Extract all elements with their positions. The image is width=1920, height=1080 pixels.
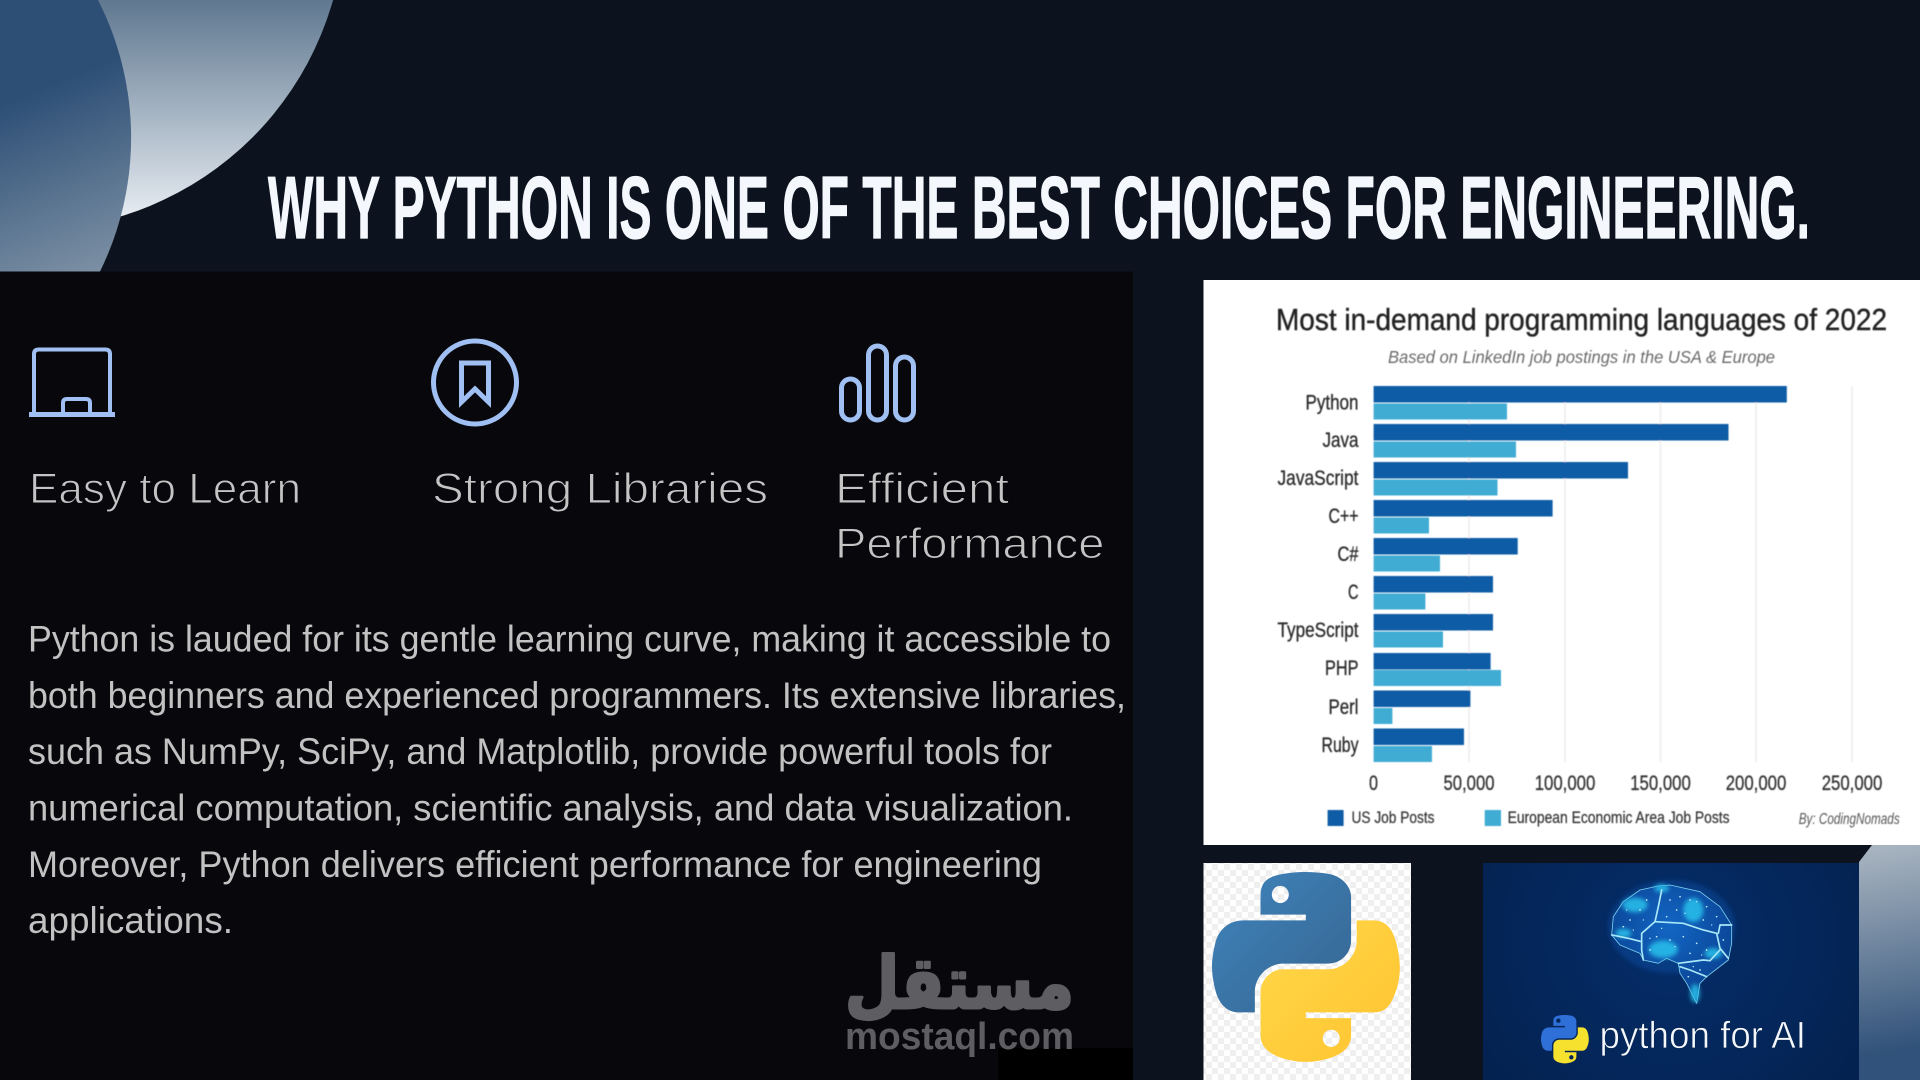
value axis labels: 50,000 bbox=[1444, 772, 1494, 795]
decorative corner shapes top left bbox=[0, 0, 345, 272]
label: strong libraries: Strong Libraries bbox=[432, 465, 768, 513]
panel: programming languages bar chart bbox=[1204, 280, 1920, 845]
language labels: Ruby bbox=[1322, 734, 1359, 757]
panel: python logo bbox=[1204, 863, 1411, 1080]
European job posts bars bbox=[1374, 404, 1516, 762]
decorative corner shape bottom right bbox=[1859, 845, 1920, 1080]
icon: laptop board bbox=[29, 350, 115, 414]
benefit: easy to learn bbox=[29, 350, 301, 513]
body paragraph: Python is lauded for its gentle learning curve, making it accessible to bbox=[28, 619, 1111, 660]
icon: python logo bbox=[1212, 872, 1400, 1062]
language labels bbox=[1278, 392, 1359, 757]
body paragraph: such as NumPy, SciPy, and Matplotlib, provide powerful tools for bbox=[28, 731, 1052, 772]
body paragraph: both beginners and experienced programmers. Its extensive libraries, bbox=[28, 675, 1126, 716]
US job posts bars bbox=[1374, 386, 1787, 745]
watermark: mostaql: مستقل bbox=[845, 941, 1074, 1025]
language labels: C++ bbox=[1328, 505, 1358, 528]
label: python for AI: python for AI bbox=[1600, 1015, 1806, 1057]
label: performance: Performance bbox=[835, 520, 1104, 568]
chart subtitle: Based on LinkedIn job postings in the USA & Europe bbox=[1388, 347, 1775, 367]
body paragraph: numerical computation, scientific analysis, and data visualization. bbox=[28, 788, 1073, 829]
icon: glowing brain bbox=[1608, 880, 1735, 1003]
watermark: mostaql bbox=[845, 941, 1074, 1058]
body paragraph: applications. bbox=[28, 900, 233, 941]
chart legend: US Job Posts bbox=[1352, 808, 1434, 827]
language labels: PHP bbox=[1325, 657, 1358, 680]
benefit: efficient performance bbox=[835, 346, 1104, 568]
benefit: strong libraries bbox=[432, 341, 768, 513]
value axis labels: 0 bbox=[1369, 772, 1378, 795]
value axis labels: 100,000 bbox=[1535, 772, 1595, 795]
value axis labels: 250,000 bbox=[1822, 772, 1882, 795]
language labels: JavaScript bbox=[1278, 467, 1359, 490]
watermark: mostaql: mostaql.com bbox=[845, 1016, 1074, 1058]
body paragraph: Moreover, Python delivers efficient performance for engineering bbox=[28, 844, 1042, 885]
panel: python for AI bbox=[1483, 863, 1859, 1080]
panel: benefits bbox=[0, 272, 1133, 1080]
language labels: Perl bbox=[1328, 696, 1358, 719]
label: efficient: Efficient bbox=[835, 465, 1009, 513]
value axis labels bbox=[1369, 772, 1882, 795]
language labels: Python bbox=[1306, 392, 1358, 414]
chart legend bbox=[1328, 808, 1900, 828]
body paragraph bbox=[28, 619, 1126, 941]
value axis labels: 150,000 bbox=[1630, 772, 1691, 795]
icon: bookmark badge bbox=[434, 341, 516, 424]
icon: small python logo bbox=[1541, 1015, 1589, 1063]
language labels: C# bbox=[1338, 543, 1359, 566]
value axis labels: 200,000 bbox=[1726, 772, 1786, 795]
language labels: Java bbox=[1322, 429, 1359, 452]
label: easy to learn: Easy to Learn bbox=[29, 465, 301, 513]
language labels: TypeScript bbox=[1278, 619, 1359, 642]
icon: bar chart bbox=[842, 346, 914, 420]
language labels: C bbox=[1348, 581, 1358, 604]
chart legend: European Economic Area Job Posts bbox=[1508, 808, 1730, 827]
